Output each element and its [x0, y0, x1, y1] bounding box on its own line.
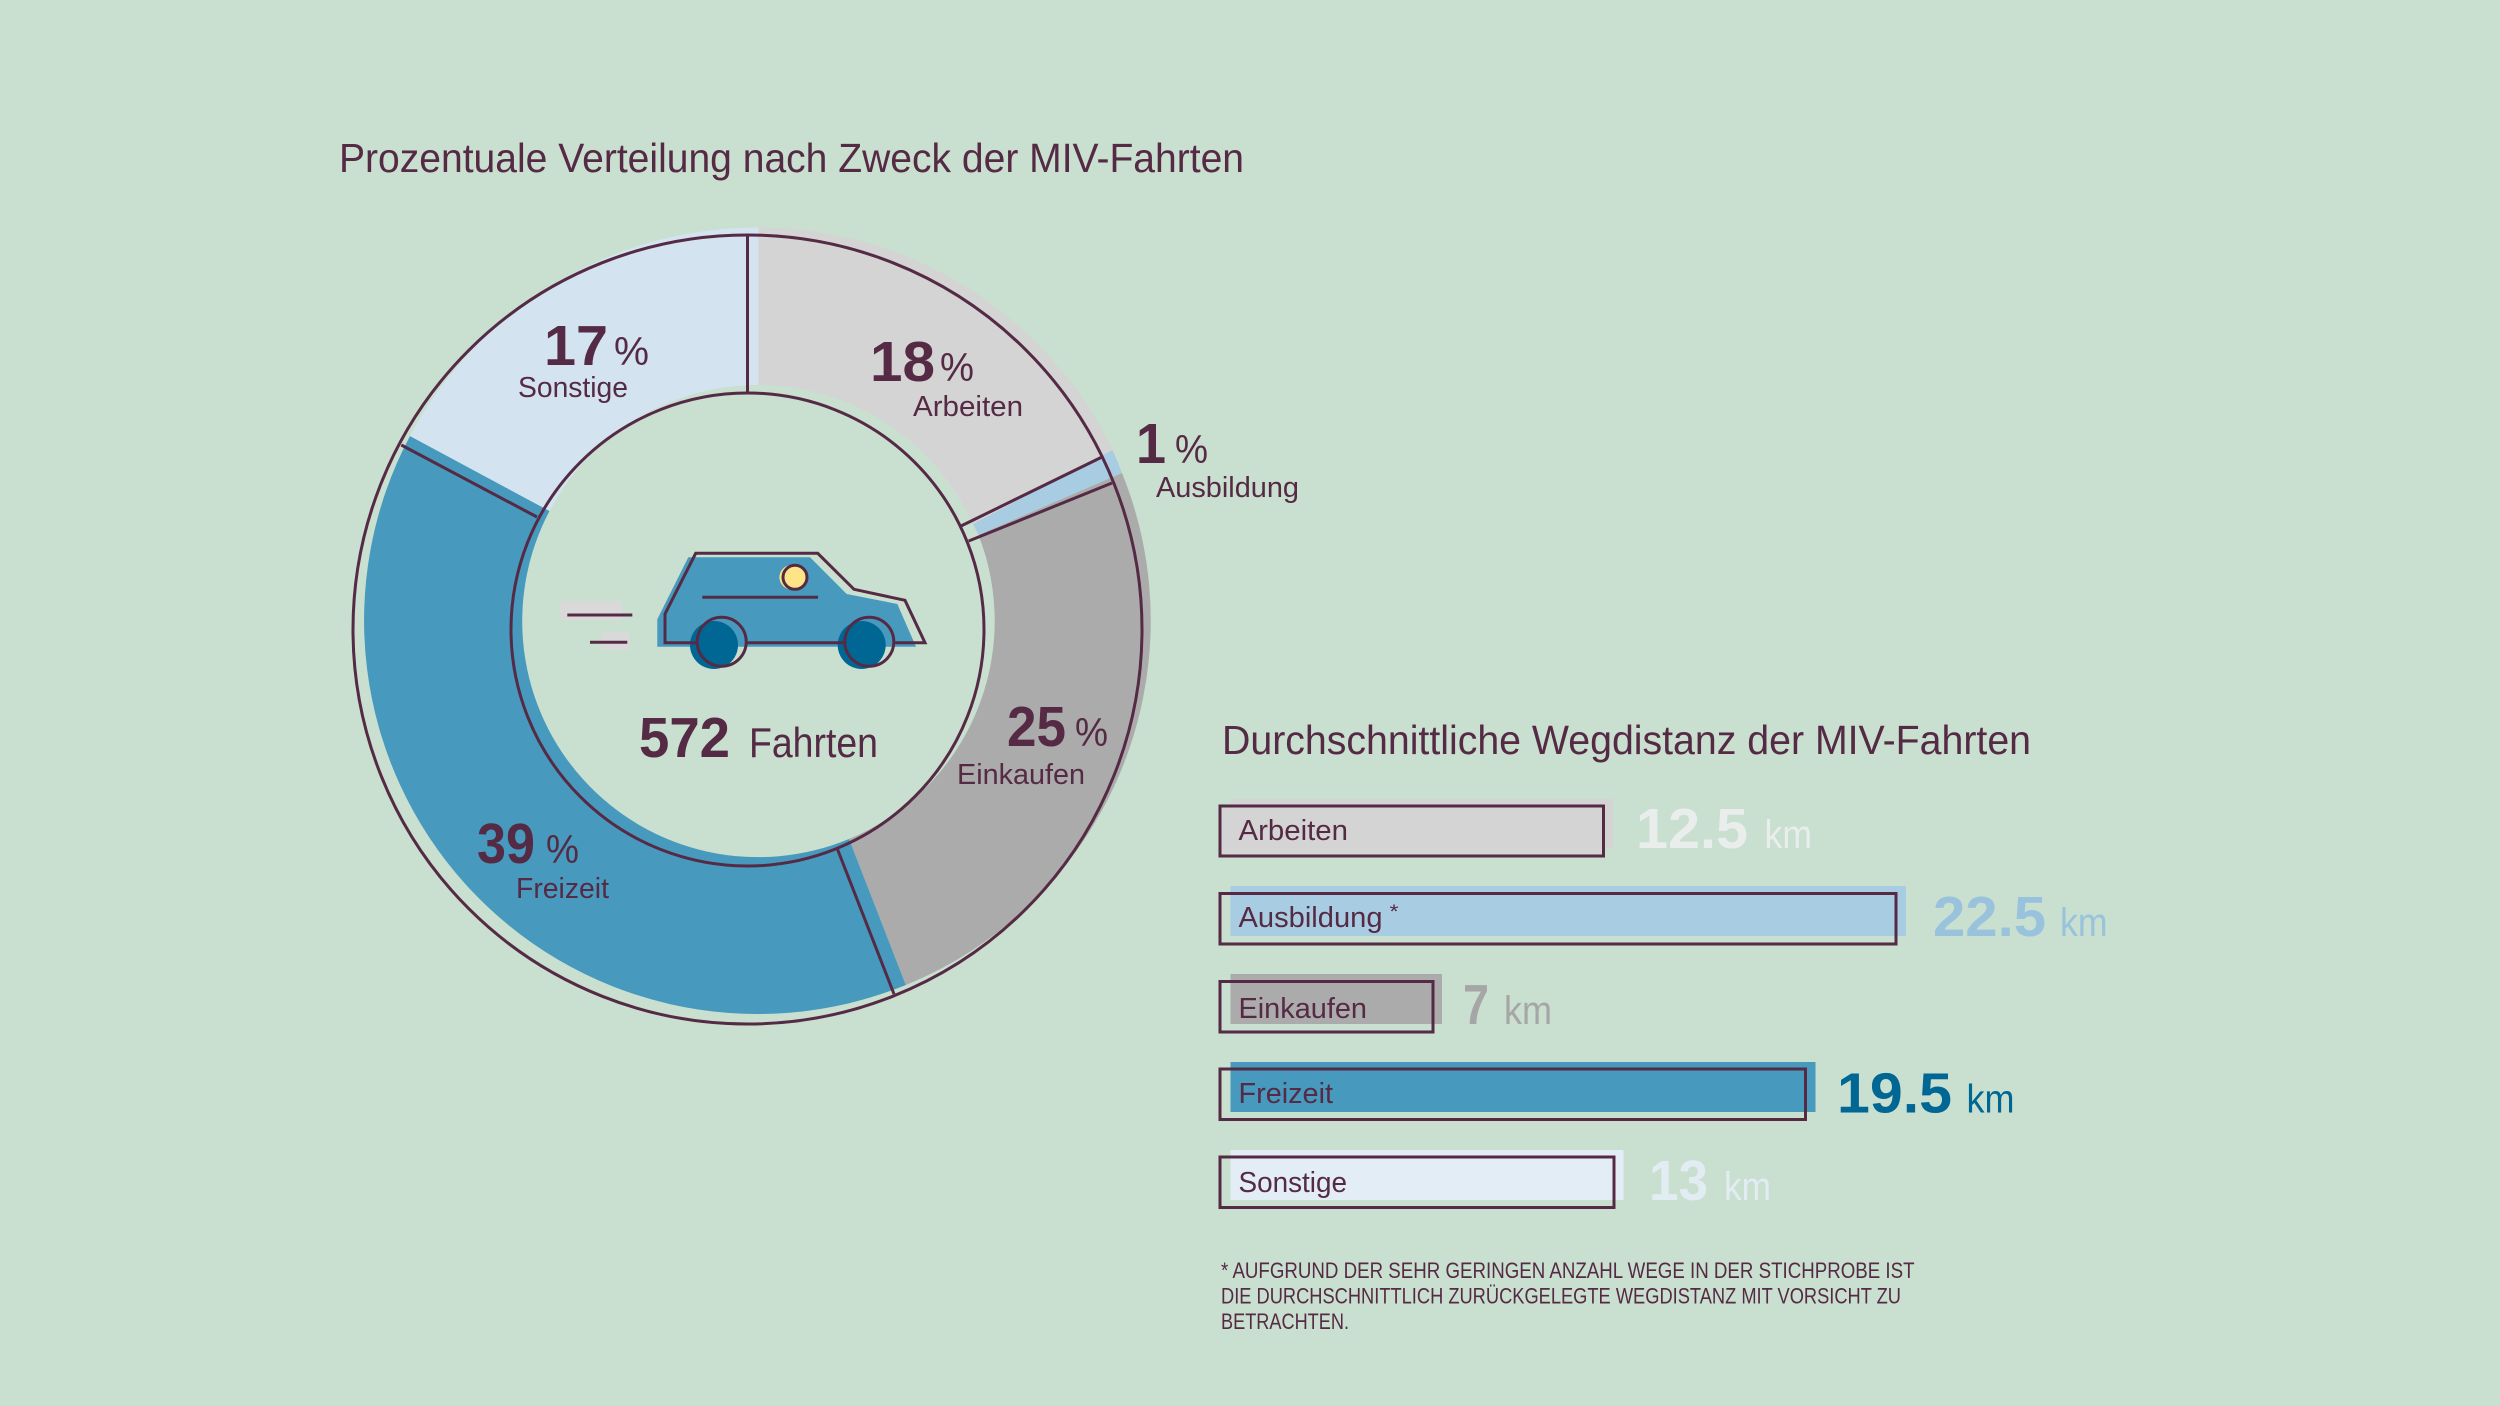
label: Sonstige 17%: [518, 314, 649, 404]
bar: Einkaufen: [1220, 973, 1552, 1037]
bar: Freizeit: Freizeit: [1238, 1078, 1333, 1110]
total: 572 Fahrten: [639, 706, 878, 770]
segment: Ausbildung 1%: [973, 450, 1122, 535]
bar: Sonstige: [1220, 1149, 1771, 1213]
total: 572 Fahrten: 572: [639, 706, 730, 770]
bar: Sonstige: km: [1724, 1165, 1771, 1209]
bar: Ausbildung: km: [2060, 901, 2108, 945]
title: Durchschnittliche Wegdistanz: Durchschnittliche Wegdistanz der MIV-Fahrten: [1222, 717, 2031, 763]
label: Einkaufen 25%: 25: [1007, 695, 1066, 759]
segment: Arbeiten 18%: [758, 228, 1112, 524]
bar: Ausbildung: *: [1390, 902, 1399, 923]
bar: Einkaufen: km: [1504, 989, 1552, 1033]
segment: Einkaufen 25%: [849, 473, 1151, 985]
car body fill: [657, 557, 916, 647]
wheels fill: [690, 621, 886, 669]
total: 572 Fahrten: Fahrten: [749, 719, 878, 766]
bar: Einkaufen: Einkaufen: [1238, 993, 1367, 1025]
label: Freizeit 39%: 39: [477, 812, 535, 876]
donut chart: [353, 227, 1151, 1024]
label: Einkaufen 25%: %: [1075, 711, 1108, 755]
speed lines: [560, 601, 632, 650]
footnote: * AUFGRUND DER SEHR GERINGEN ANZAHL WEGE IN DER STICHPROBE IST: [1221, 1258, 1914, 1283]
bar: Sonstige: 13: [1649, 1149, 1708, 1213]
label: Sonstige 17%: Sonstige: [518, 372, 628, 404]
label: Ausbildung 1%: [1136, 412, 1299, 504]
headlight: [779, 565, 807, 590]
label: Arbeiten 18%: %: [940, 346, 974, 390]
label: Arbeiten 18%: Arbeiten: [913, 391, 1023, 423]
footnote: [1221, 1258, 1914, 1334]
bar: Freizeit: [1220, 1062, 2014, 1126]
title: Prozentuale Verteilung: Prozentuale Verteilung nach Zweck der MIV-Fahrten: [339, 135, 1244, 181]
bar: Ausbildung: 22.5: [1933, 885, 2046, 949]
label: Freizeit 39%: Freizeit: [516, 873, 609, 905]
bar: Ausbildung: Ausbildung: [1238, 902, 1382, 934]
label: Sonstige 17%: 17: [544, 314, 608, 378]
label: Ausbildung 1%: Ausbildung: [1156, 472, 1299, 504]
bar: Arbeiten: Arbeiten: [1238, 815, 1348, 847]
footnote: BETRACHTEN.: [1221, 1309, 1349, 1334]
footnote: DIE DURCHSCHNITTLICH ZURÜCKGELEGTE WEGDISTANZ MIT VORSICHT ZU: [1221, 1284, 1901, 1308]
segment: Sonstige 17%: [410, 227, 758, 511]
bar: Arbeiten: km: [1764, 813, 1812, 857]
car outline: [665, 553, 925, 666]
bar: Arbeiten: [1220, 797, 1812, 861]
segment: Freizeit 39%: [364, 436, 906, 1014]
label: Einkaufen 25%: [957, 695, 1108, 791]
bar: Arbeiten: 12.5: [1636, 797, 1748, 861]
label: Einkaufen 25%: Einkaufen: [957, 759, 1085, 791]
icon: car: [560, 553, 925, 669]
label: Freizeit 39%: %: [546, 828, 579, 872]
bar: Einkaufen: 7: [1463, 973, 1489, 1037]
label: Ausbildung 1%: %: [1175, 428, 1208, 472]
label: Sonstige 17%: %: [614, 330, 649, 374]
label: Freizeit 39%: [477, 812, 609, 905]
bar: Freizeit: km: [1966, 1078, 2014, 1122]
bar: Sonstige: Sonstige: [1238, 1167, 1347, 1199]
label: Arbeiten 18%: [870, 330, 1023, 423]
donut outline: [353, 235, 1142, 1024]
bar: Freizeit: 19.5: [1837, 1062, 1952, 1126]
label: Ausbildung 1%: 1: [1136, 412, 1166, 476]
label: Arbeiten 18%: 18: [870, 330, 935, 394]
bar: Ausbildung: [1220, 885, 2108, 949]
